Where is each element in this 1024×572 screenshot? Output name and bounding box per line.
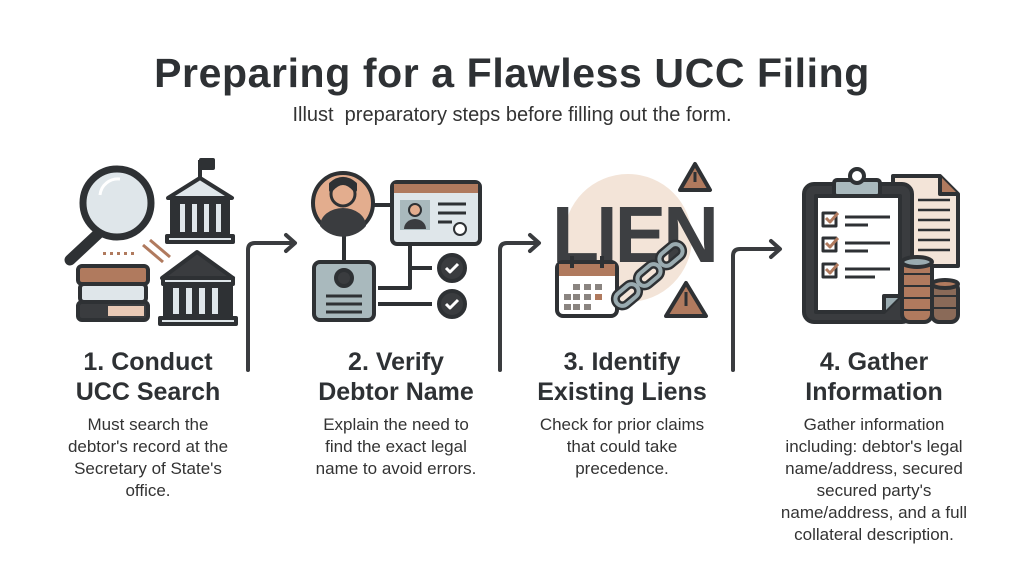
- heading: step 1: UCC Search: [76, 378, 220, 406]
- arrow: step 3 to 4: [733, 241, 780, 370]
- heading: step 2: [318, 348, 474, 406]
- text: step 4: Gather information: [804, 415, 944, 434]
- heading: step 4: 4. Gather: [820, 348, 928, 376]
- text: step 3: that could take: [567, 437, 677, 456]
- text: step 1: [68, 415, 228, 500]
- text: step 3: [540, 415, 704, 478]
- text: step 4: name/address, and a full: [781, 503, 967, 522]
- text: step 4: including: debtor's legal: [785, 437, 963, 456]
- heading: step 3: [537, 348, 707, 406]
- heading: step 1: 1. Conduct: [83, 348, 213, 376]
- heading: step 2: Debtor Name: [318, 378, 474, 406]
- heading: step 3: Existing Liens: [537, 378, 707, 406]
- text: step 2: [316, 415, 476, 478]
- text: step 4: name/address, secured: [785, 459, 963, 478]
- heading: step 4: Information: [805, 378, 943, 406]
- text: step 2: Explain the need to: [323, 415, 469, 434]
- text: step 2: name to avoid errors.: [316, 459, 476, 478]
- icon: search and government buildings: [70, 160, 236, 324]
- text: step 1: Secretary of State's: [74, 459, 222, 478]
- heading: step 4: [805, 348, 943, 406]
- arrow: step 2 to 3: [500, 235, 539, 370]
- text: step 4: collateral description.: [794, 525, 954, 544]
- icon: lien with chain and warnings: [552, 164, 716, 316]
- text: step 4: secured party's: [817, 481, 931, 500]
- arrow: step 1 to 2: [248, 235, 295, 370]
- icon: lien with chain and warnings: LIEN: [552, 190, 716, 279]
- icon: debtor identity verification: [313, 173, 480, 320]
- subtitle: Illust preparatory steps before filling out the form.: [292, 104, 732, 126]
- text: step 1: Must search the: [88, 415, 208, 434]
- text: step 2: find the exact legal: [325, 437, 467, 456]
- heading: step 3: 3. Identify: [564, 348, 680, 376]
- icon: clipboard, document and coins: [804, 169, 958, 322]
- title: Preparing for a Flawless UCC Filing: [154, 50, 870, 96]
- text: step 3: Check for prior claims: [540, 415, 704, 434]
- heading: step 2: 2. Verify: [348, 348, 444, 376]
- text: step 1: debtor's record at the: [68, 437, 228, 456]
- heading: step 1: [76, 348, 220, 406]
- text: step 1: office.: [125, 481, 171, 500]
- text: step 4: [781, 415, 967, 544]
- text: step 3: precedence.: [575, 459, 669, 478]
